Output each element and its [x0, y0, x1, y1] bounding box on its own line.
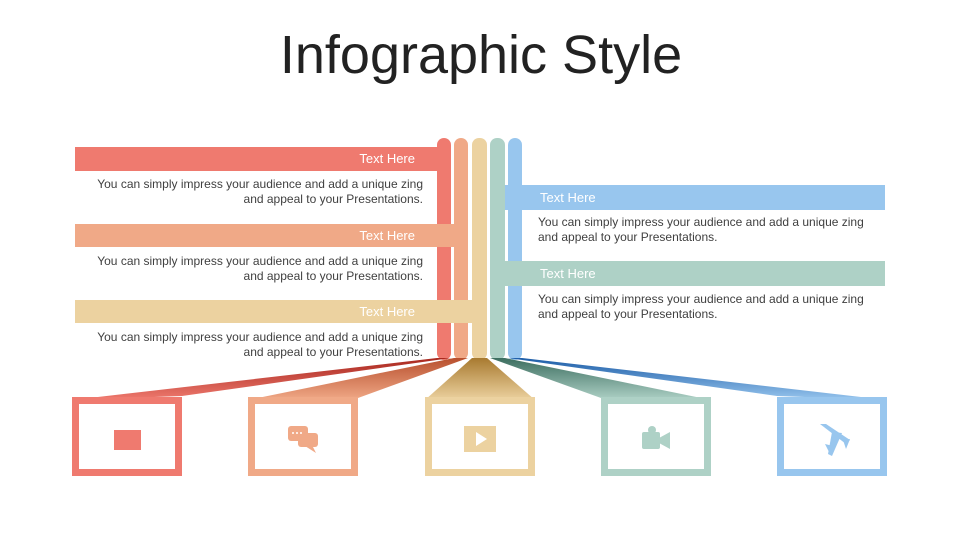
horizontal bars: [75, 147, 885, 323]
text: You can simply impress your audience and add a unique zing: [538, 292, 864, 306]
text: and appeal to your Presentations.: [244, 269, 423, 283]
title: Infographic Style: [280, 25, 682, 85]
icon: camera: [642, 426, 670, 449]
icon: plane: [820, 424, 850, 456]
icon: chat: [288, 426, 318, 453]
icon: rectangle: [114, 430, 141, 450]
text: left 1: Text Here: [359, 151, 415, 166]
text: You can simply impress your audience and add a unique zing: [97, 330, 423, 344]
funnels: [72, 358, 887, 400]
vertical bars: [437, 138, 522, 360]
text: right 1: Text Here: [540, 190, 596, 205]
icon: video: [464, 426, 496, 452]
text: You can simply impress your audience and add a unique zing: [97, 177, 423, 191]
icon boxes: [76, 400, 884, 472]
text: You can simply impress your audience and add a unique zing: [97, 254, 423, 268]
text: and appeal to your Presentations.: [538, 230, 717, 244]
text: You can simply impress your audience and add a unique zing: [538, 215, 864, 229]
text: left 3: Text Here: [359, 304, 415, 319]
text: and appeal to your Presentations.: [244, 345, 423, 359]
text: and appeal to your Presentations.: [538, 307, 717, 321]
text: left 2: Text Here: [359, 228, 415, 243]
text: and appeal to your Presentations.: [244, 192, 423, 206]
text: right 2: Text Here: [540, 266, 596, 281]
